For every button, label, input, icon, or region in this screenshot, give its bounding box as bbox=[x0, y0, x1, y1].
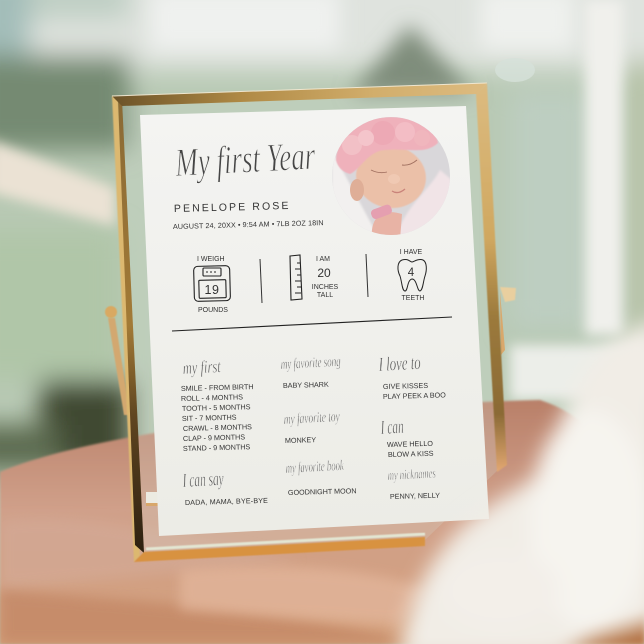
column: favorite book: GOODNIGHT MOON bbox=[288, 486, 357, 497]
stat: height bbox=[290, 255, 339, 300]
column: my first: TOOTH - 5 MONTHS bbox=[182, 402, 251, 413]
birth details: AUGUST 24, 20XX • 9:54 AM • 7LB 2OZ 18IN bbox=[173, 218, 324, 231]
stat: weight: 19 bbox=[204, 283, 220, 297]
column: I love to bbox=[377, 352, 446, 401]
title: My first Year bbox=[173, 133, 317, 185]
stat: height: 20 bbox=[317, 266, 331, 280]
card contents bbox=[172, 133, 452, 507]
column: I can: WAVE HELLO bbox=[387, 439, 433, 449]
glass pane bbox=[122, 90, 498, 552]
column: I can say: I can say bbox=[182, 468, 224, 492]
column: favorite toy: my favorite toy bbox=[283, 409, 340, 428]
column: favorite song bbox=[280, 354, 341, 390]
name: PENELOPE ROSE bbox=[174, 200, 291, 215]
column: my first: SMILE - FROM BIRTH bbox=[181, 382, 254, 393]
column: I can bbox=[380, 416, 434, 459]
stat: weight bbox=[194, 256, 230, 314]
column: favorite toy bbox=[283, 409, 340, 445]
wooden table bbox=[0, 400, 644, 644]
paper card bbox=[140, 106, 489, 536]
column: my first: STAND - 9 MONTHS bbox=[183, 442, 251, 453]
column: I can: BLOW A KISS bbox=[388, 449, 434, 459]
stat: teeth: I HAVE bbox=[400, 249, 423, 256]
column: favorite song: my favorite song bbox=[280, 354, 341, 373]
column: favorite book: my favorite book bbox=[285, 458, 344, 477]
icon: ruler bbox=[290, 255, 302, 300]
stat: height: INCHES bbox=[312, 284, 339, 291]
column: my first: CRAWL - 8 MONTHS bbox=[183, 422, 252, 433]
icon: tooth bbox=[398, 259, 426, 291]
stat: height: I AM bbox=[316, 256, 330, 263]
stat: weight: POUNDS bbox=[198, 307, 228, 314]
stat: weight: I WEIGH bbox=[197, 256, 225, 263]
column: favorite book bbox=[285, 458, 357, 497]
column: I can: I can bbox=[380, 416, 404, 439]
feather decoration bbox=[400, 320, 644, 644]
gold frame bbox=[112, 83, 507, 562]
section divider bbox=[172, 317, 452, 331]
column: my nicknames: my nicknames bbox=[387, 466, 436, 484]
baby photo bbox=[330, 115, 452, 240]
column: I can say: DADA, MAMA, BYE-BYE bbox=[185, 496, 268, 507]
column: my nicknames: PENNY, NELLY bbox=[390, 491, 440, 501]
column: I love to: PLAY PEEK A BOO bbox=[383, 390, 446, 401]
stat: teeth bbox=[398, 249, 426, 302]
column: I love to: GIVE KISSES bbox=[383, 381, 428, 391]
column: my first: my first bbox=[182, 356, 222, 378]
column: my first: CLAP - 9 MONTHS bbox=[183, 432, 245, 443]
column: my nicknames bbox=[387, 466, 440, 501]
column: my first: SIT - 7 MONTHS bbox=[182, 413, 237, 423]
column: I can say bbox=[182, 468, 268, 507]
column: my first bbox=[181, 356, 254, 453]
icon: scale bbox=[194, 266, 230, 301]
column: my first: ROLL - 4 MONTHS bbox=[181, 392, 243, 403]
divider bbox=[366, 254, 368, 297]
column: favorite song: BABY SHARK bbox=[283, 380, 329, 390]
column: favorite toy: MONKEY bbox=[285, 435, 316, 445]
column: I love to: I love to bbox=[377, 352, 421, 376]
stat: teeth: 4 bbox=[408, 267, 415, 279]
gold frame stand legs bbox=[105, 287, 516, 506]
stat: teeth: TEETH bbox=[402, 295, 424, 302]
stat: height: TALL bbox=[317, 292, 333, 299]
divider bbox=[260, 259, 262, 303]
